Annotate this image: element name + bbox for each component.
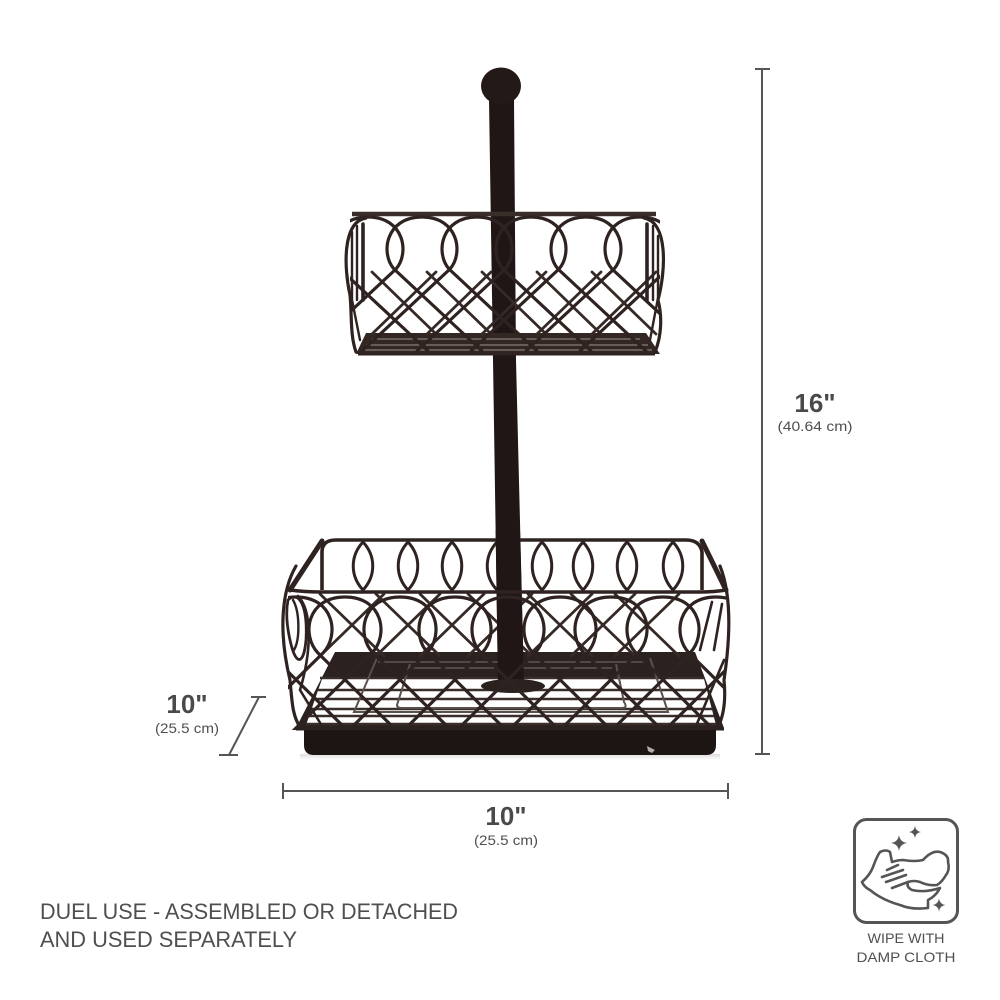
dimension label: height: 16"	[794, 388, 836, 418]
icon caption: DAMP CLOTH	[856, 949, 956, 965]
lower basket back lenses	[353, 542, 683, 590]
dimension label: width	[474, 801, 538, 848]
lower basket front rail	[290, 590, 726, 592]
icon caption: WIPE WITH	[868, 930, 944, 946]
dimension: depth line	[219, 697, 266, 755]
note text	[40, 899, 458, 952]
upper basket front rail	[358, 352, 655, 356]
lower basket	[244, 530, 768, 755]
dimension: width line	[283, 783, 728, 799]
lower basket bottom rail	[296, 728, 724, 730]
base paint chip	[647, 746, 655, 753]
icon: wipe with damp cloth	[854, 820, 958, 922]
dimension label: height: (40.64 cm)	[778, 418, 852, 434]
lower basket front loops	[288, 595, 726, 730]
lower basket back rail	[322, 540, 702, 590]
lower basket back lattice	[320, 594, 679, 656]
note text: DUEL USE - ASSEMBLED OR DETACHED	[40, 899, 458, 924]
lower basket floor	[296, 652, 724, 728]
icon: sparkles	[891, 826, 945, 911]
lower basket left side	[283, 541, 322, 727]
note text: AND USED SEPARATELY	[40, 927, 297, 952]
upper basket floor	[356, 333, 660, 354]
dimension label: width: (25.5 cm)	[474, 832, 538, 848]
upper basket front loops	[350, 216, 660, 350]
icon caption	[856, 930, 956, 965]
lower basket right side	[696, 541, 729, 727]
dimension: height line	[755, 69, 770, 754]
dimension label: depth: 10"	[166, 689, 208, 719]
upper basket back lattice	[372, 272, 656, 334]
icon: hand with cloth	[862, 850, 949, 909]
dimension label: width: 10"	[485, 801, 527, 831]
pole knob	[481, 68, 521, 104]
upper basket top rail	[352, 212, 656, 216]
lower basket base	[304, 730, 716, 755]
center pole	[489, 100, 524, 684]
dimension label: height	[778, 388, 852, 434]
base shadow	[300, 754, 720, 760]
product: two-tier wire basket	[281, 68, 730, 758]
dimension label: depth	[155, 689, 219, 736]
upper basket	[344, 212, 666, 356]
upper basket right side	[644, 218, 663, 352]
upper basket left side	[346, 218, 366, 352]
pole lower section and base disc	[481, 530, 545, 693]
dimension label: depth: (25.5 cm)	[155, 720, 219, 736]
